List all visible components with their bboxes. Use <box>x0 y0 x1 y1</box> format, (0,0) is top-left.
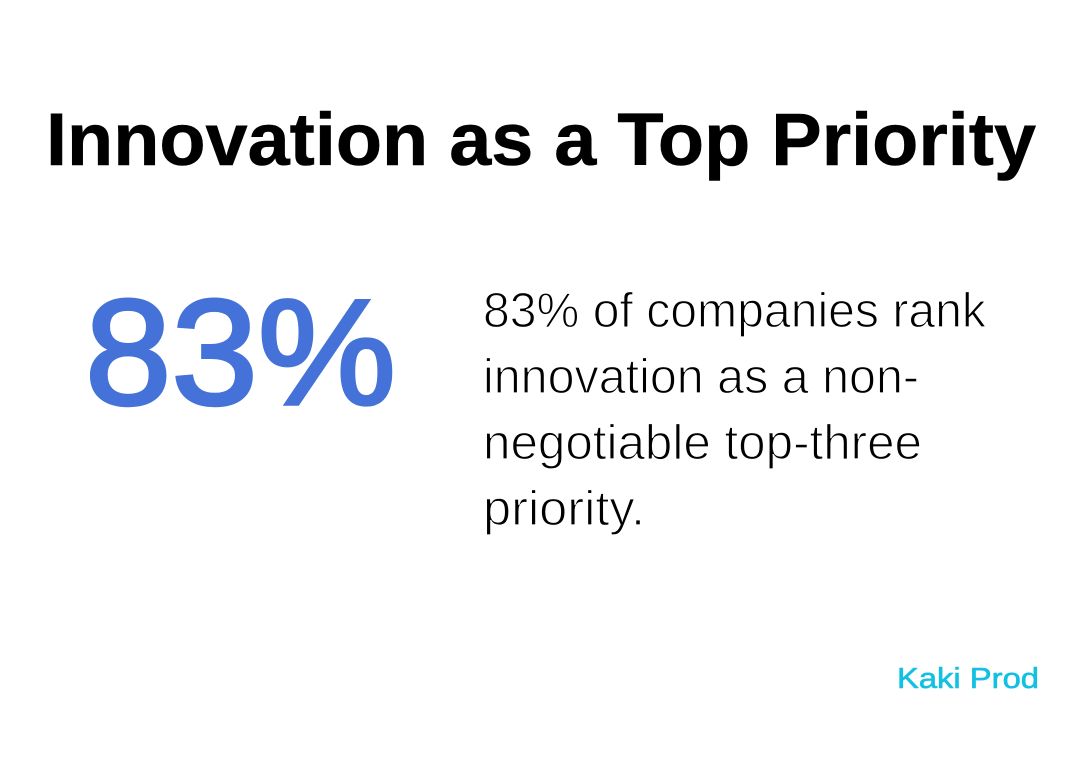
description text <box>483 284 986 536</box>
description text: innovation as a non- <box>483 350 919 404</box>
title: Innovation as a Top Priority <box>46 98 1036 181</box>
big stat: 83%: 83% <box>85 268 396 436</box>
logo: Kaki Prod: Kaki Prod <box>897 663 1039 695</box>
description text: priority. <box>483 482 645 536</box>
description text: 83% of companies rank <box>483 284 986 338</box>
description text: negotiable top-three <box>483 416 922 470</box>
